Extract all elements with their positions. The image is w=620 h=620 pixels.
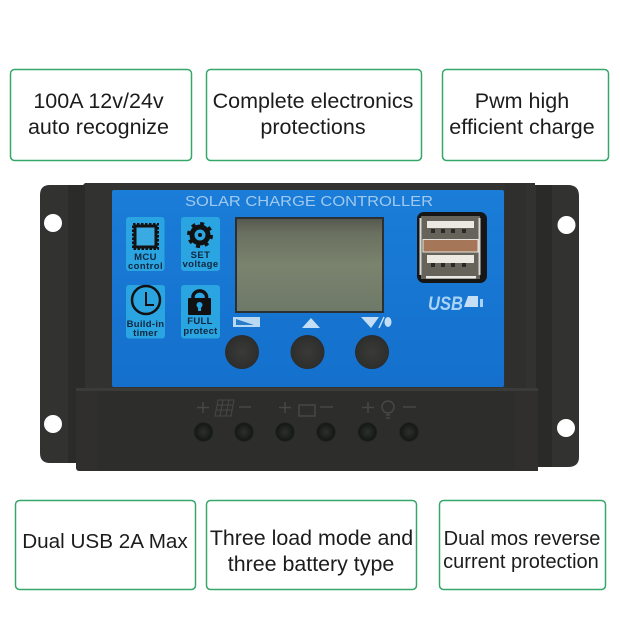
mounting hole: top left	[44, 214, 62, 232]
callout: 100A auto recognize: auto recognize	[28, 115, 169, 139]
icon: build-in timer: timer	[133, 328, 158, 339]
icon: SET voltage: SET	[191, 250, 210, 261]
button: left	[225, 335, 259, 369]
callout: PWM high efficient charge: efficient charge	[449, 115, 595, 139]
callout: PWM high efficient charge	[442, 70, 608, 160]
callout: 100A auto recognize	[10, 70, 192, 160]
device housing	[40, 183, 579, 471]
solar charge controller device	[40, 183, 579, 471]
callout: dual mos protection	[440, 500, 606, 590]
callout: PWM high efficient charge: Pwm high	[475, 89, 569, 113]
icon: SET voltage	[181, 217, 220, 271]
callout: 100A auto recognize: 100A 12v/24v	[33, 89, 164, 113]
icon: full protect: protect	[183, 326, 218, 337]
mounting hole: bottom right	[557, 419, 575, 437]
LCD screen	[235, 217, 384, 313]
callout: complete electronics protections	[206, 70, 422, 160]
USB port	[417, 212, 487, 315]
icon: full protect	[181, 285, 220, 338]
callout: dual USB	[16, 500, 196, 590]
icon: build-in timer	[126, 285, 165, 339]
callout: load mode and battery type	[206, 500, 416, 590]
mounting hole: top right	[558, 216, 576, 234]
mode indicator icons	[233, 317, 392, 328]
button: right	[355, 335, 389, 369]
panel title: SOLAR CHARGE CONTROLLER	[185, 194, 433, 210]
terminal block	[76, 388, 538, 471]
callout: load mode and battery type: three battery type	[228, 552, 394, 576]
callout: complete electronics protections: protections	[260, 115, 366, 139]
callout: dual mos protection: current protection	[443, 551, 599, 573]
icon: MCU control: MCU	[134, 252, 157, 263]
screw terminals	[194, 422, 419, 442]
callout: dual mos protection: Dual mos reverse	[444, 528, 600, 550]
callout: dual USB: Dual USB 2A Max	[22, 530, 188, 553]
button: middle	[290, 335, 324, 369]
icon: MCU control	[126, 217, 164, 272]
icon: full protect: FULL	[187, 316, 213, 327]
terminal polarity symbols	[197, 400, 416, 418]
icon: SET voltage: voltage	[182, 259, 219, 270]
mounting hole: bottom left	[44, 415, 62, 433]
callout: load mode and battery type: Three load mode and	[210, 526, 413, 550]
callout: complete electronics protections: Complete electronics	[213, 89, 413, 113]
blue front panel	[112, 190, 504, 387]
USB logo: USB	[428, 294, 463, 315]
icon: build-in timer: Build-in	[127, 319, 164, 330]
icon: MCU control: control	[128, 261, 163, 272]
